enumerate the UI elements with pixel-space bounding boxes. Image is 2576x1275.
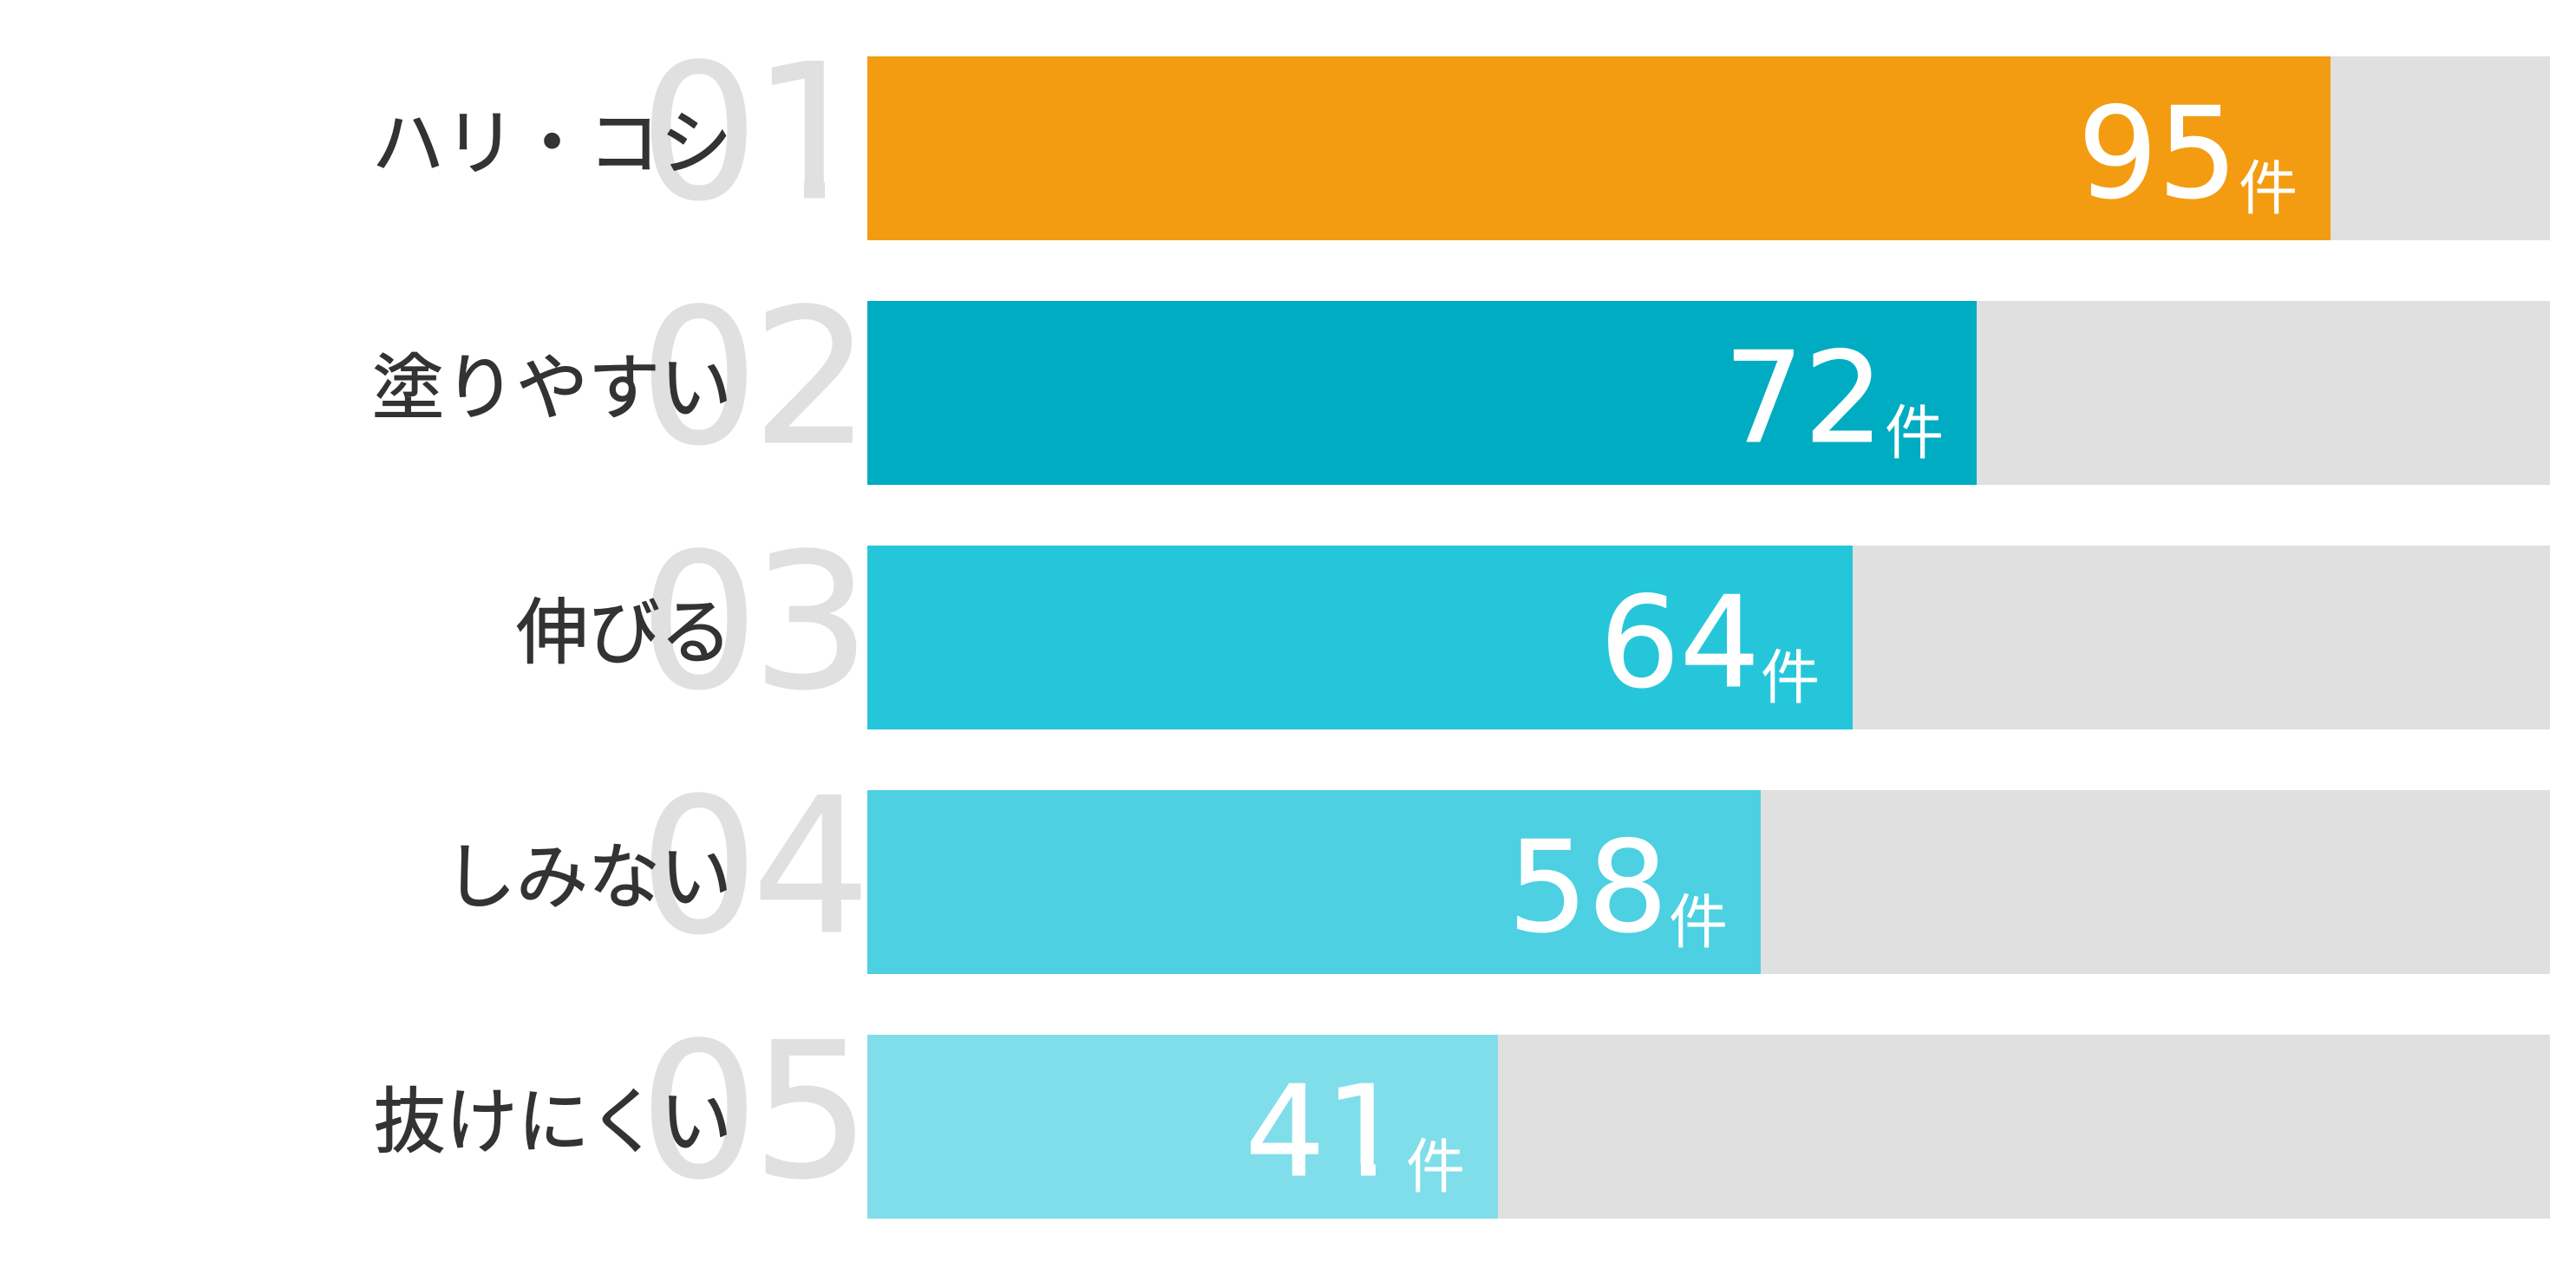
row 3: 伸びる 64件 xyxy=(516,513,2550,731)
unit 2: 件 xyxy=(1885,385,1944,471)
unit 3: 件 xyxy=(1761,630,1820,716)
value 72: 72 xyxy=(1723,325,1884,472)
rank number 03: 03 xyxy=(639,513,864,731)
bar value 4 xyxy=(867,790,1761,974)
row 4: しみない 58件 xyxy=(444,758,2550,976)
bar value 1 xyxy=(867,56,2331,240)
bar value 5 xyxy=(867,1035,1498,1219)
row 5: 抜けにくい 41件 xyxy=(375,1035,2550,1219)
bar value 2 xyxy=(867,301,1977,485)
label 3: 伸びる xyxy=(516,574,732,678)
unit 1: 件 xyxy=(2239,141,2298,226)
label 4: しみない xyxy=(444,819,732,923)
bar track 3 xyxy=(867,546,2550,729)
bar value 3 xyxy=(867,546,1853,729)
rank number 02: 02 xyxy=(639,269,864,487)
bar track 4 xyxy=(867,790,2550,974)
unit 4: 件 xyxy=(1669,874,1728,960)
ranking bar chart xyxy=(375,56,2550,1219)
bar track 5 xyxy=(867,1035,2550,1219)
row 1: ハリ・コシ 95件 xyxy=(376,56,2550,240)
label 2: 塗りやすい xyxy=(372,330,732,434)
bar track 1 xyxy=(867,56,2550,240)
value 41: 41 xyxy=(1245,1059,1405,1206)
label 5: 抜けにくい xyxy=(374,1063,732,1167)
row 2: 塗りやすい 72件 xyxy=(372,269,2550,487)
unit 5: 件 xyxy=(1406,1119,1465,1205)
bar track 2 xyxy=(867,301,2550,485)
label 1: ハリ・コシ xyxy=(372,85,732,189)
value 58: 58 xyxy=(1507,814,1668,961)
rank number 04: 04 xyxy=(639,758,864,976)
value 95: 95 xyxy=(2077,81,2238,227)
rank number 05: 05 xyxy=(639,1003,864,1220)
rank number 01: 01 xyxy=(639,24,864,242)
value 64: 64 xyxy=(1599,570,1760,716)
